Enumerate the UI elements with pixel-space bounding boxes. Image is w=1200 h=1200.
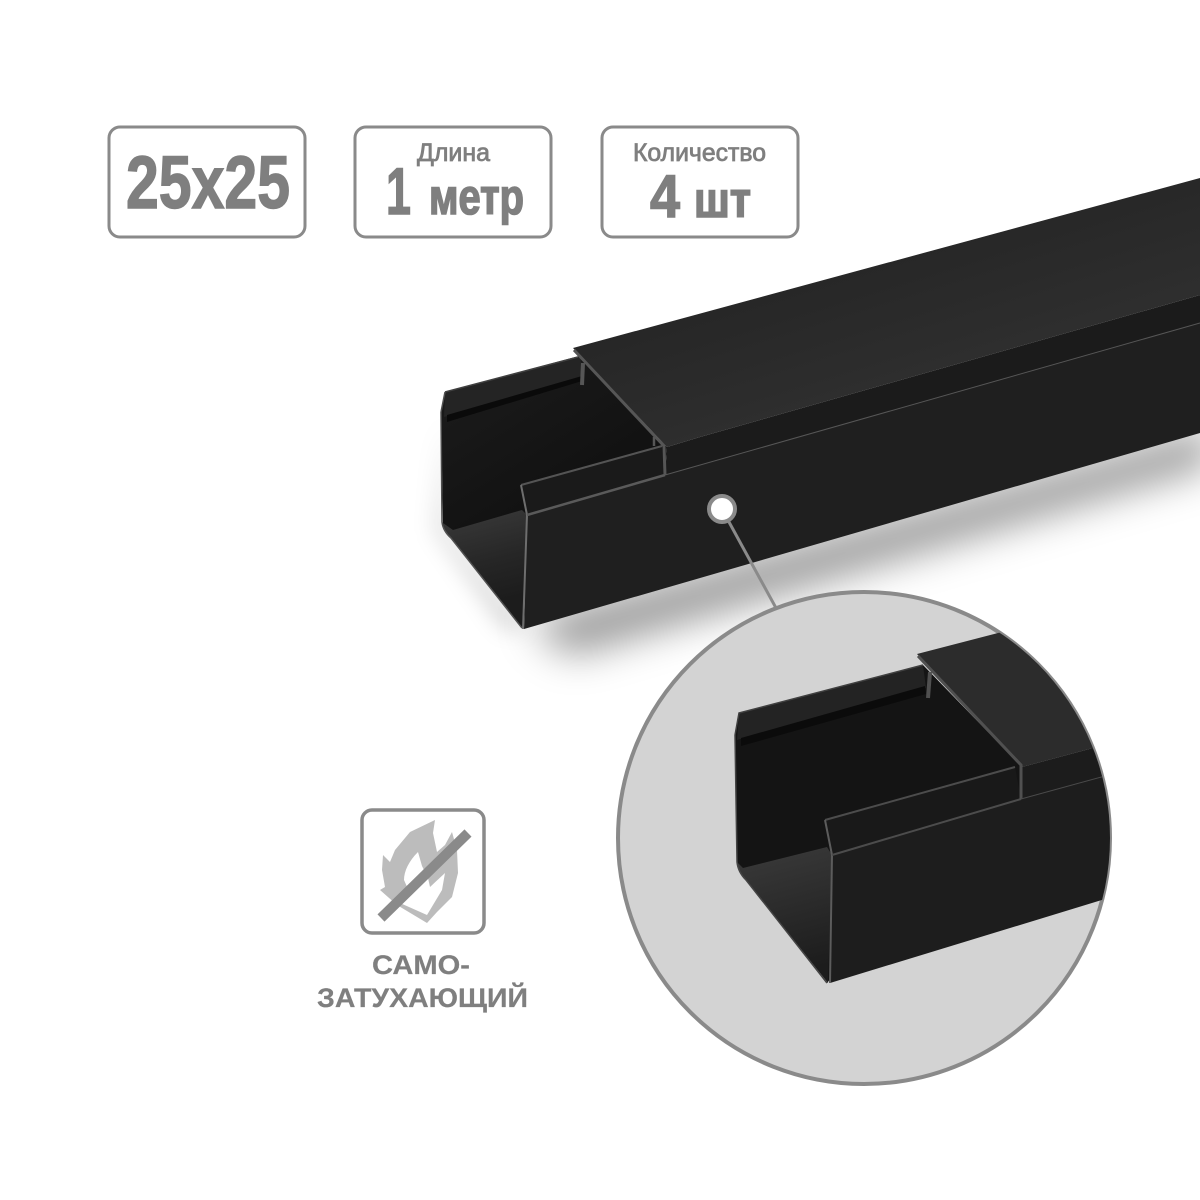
back lip — [444, 356, 583, 417]
badge: size 25x25: 25x25 — [126, 141, 290, 224]
icon: self-extinguishing flame — [362, 810, 484, 933]
badge: quantity 4 pieces — [602, 127, 798, 237]
inset front inner wall — [825, 767, 1021, 855]
badge: length 1 metre: метр — [429, 169, 524, 225]
inset detail circle — [616, 590, 1112, 1086]
cover side — [665, 295, 1200, 475]
label: self-extinguishing: САМО- — [372, 950, 470, 980]
front inner wall — [521, 446, 665, 515]
inset interior — [735, 665, 1022, 983]
channel interior — [441, 356, 667, 629]
badge: length 1 metre: 1 — [386, 154, 411, 228]
cable channel product — [441, 178, 1200, 629]
label: self-extinguishing: ЗАТУХАЮЩИЙ — [317, 982, 528, 1013]
channel edge highlights — [521, 446, 662, 485]
cable channel shadow — [436, 420, 1200, 655]
label: self-extinguishing — [317, 950, 528, 1013]
inset edge highlights — [825, 767, 1015, 820]
channel floor — [443, 510, 527, 628]
badge: quantity 4 pieces: 4 — [650, 163, 681, 230]
badge: quantity 4 pieces: Количество — [633, 139, 766, 167]
cover top — [573, 178, 1200, 447]
pointer dot and leader line — [709, 496, 776, 608]
badge: size 25x25 — [109, 127, 305, 237]
inset back lip — [737, 665, 926, 740]
badge: length 1 metre — [355, 127, 551, 237]
badge: length 1 metre: Длина — [417, 139, 490, 167]
inset floor — [737, 847, 832, 983]
inset cover — [917, 632, 1093, 767]
inset outer face — [831, 776, 1110, 983]
badge: quantity 4 pieces: шт — [694, 172, 751, 228]
front outer face — [524, 323, 1200, 629]
